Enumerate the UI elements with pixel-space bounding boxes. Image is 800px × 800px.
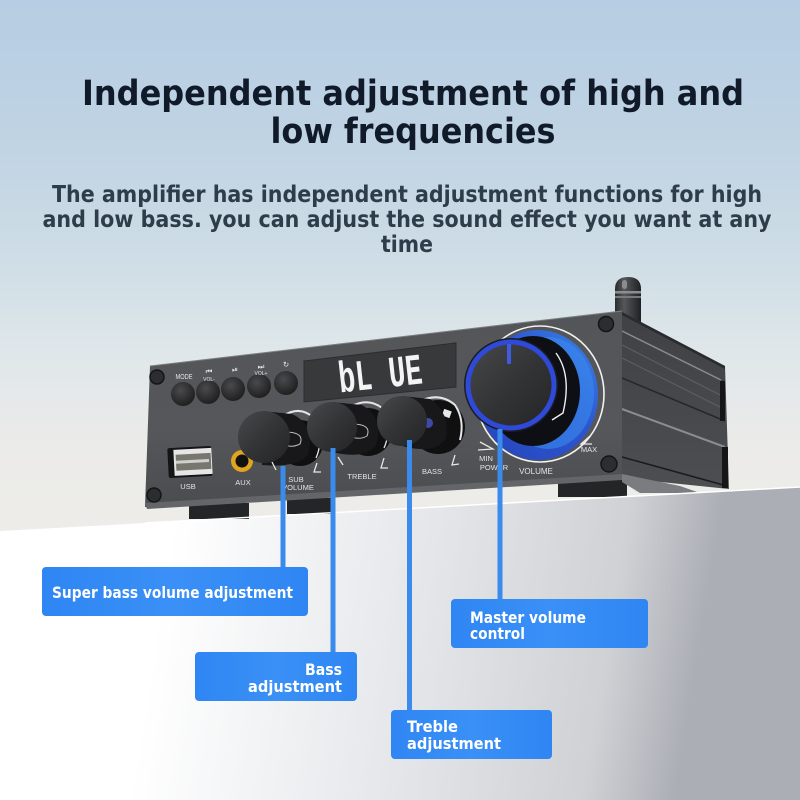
callout: master volume control: Master volume — [470, 608, 586, 627]
button labels: ⏮ — [206, 367, 213, 376]
master volume labels: VOLUME — [519, 467, 553, 476]
table surface — [0, 487, 800, 800]
USB port — [167, 446, 213, 491]
knob: sub volume — [238, 411, 323, 492]
knob: sub volume: SUB — [288, 475, 304, 484]
description text — [42, 182, 772, 258]
callout: bass adjustment: adjustment — [248, 677, 342, 696]
description text: time — [381, 232, 433, 258]
master volume labels: MAX — [581, 445, 597, 454]
title: Independent adjustment of high and — [82, 74, 744, 114]
callout: treble adjustment — [391, 710, 552, 759]
amplifier — [145, 277, 729, 519]
master volume labels — [479, 445, 597, 476]
callout: super bass volume adjustment: Super bass volume adjustment — [52, 583, 293, 602]
callout: master volume control: control — [470, 624, 525, 643]
button labels: ↻ — [283, 360, 289, 369]
callout: treble adjustment: adjustment — [407, 734, 501, 753]
button labels: VOL+ — [255, 371, 268, 377]
front panel — [145, 311, 622, 507]
knob: treble — [307, 402, 392, 481]
master volume labels: POWER — [480, 463, 509, 472]
button labels: ⏭ — [258, 362, 265, 371]
scale marks — [272, 436, 592, 472]
callout: super bass volume adjustment — [42, 567, 308, 616]
master volume labels: MIN — [479, 454, 493, 463]
knob: bass — [377, 396, 465, 476]
LED display: bL UE — [336, 348, 425, 406]
AUX jack: AUX — [235, 478, 251, 487]
callout: bass adjustment — [195, 652, 357, 701]
side fins — [622, 312, 729, 493]
knob: sub volume: VOLUME — [282, 483, 314, 492]
knob: treble: TREBLE — [347, 472, 377, 481]
buttons — [171, 371, 298, 406]
title: low frequencies — [270, 112, 556, 152]
AUX jack — [231, 450, 253, 487]
background sky — [0, 0, 800, 540]
button labels — [176, 360, 289, 383]
connector lines — [280, 429, 502, 711]
callout: master volume control — [451, 599, 648, 648]
table edge highlight — [145, 487, 800, 523]
antenna — [615, 277, 641, 325]
callout: treble adjustment: Treble — [407, 717, 458, 736]
USB port: USB — [180, 482, 196, 491]
feet — [189, 480, 627, 519]
button labels: ⏯ — [232, 365, 238, 374]
knob: bass: BASS — [422, 467, 442, 476]
button labels: MODE — [176, 372, 192, 381]
title — [82, 74, 744, 152]
callout: bass adjustment: Bass — [305, 660, 342, 679]
button labels: VOL- — [203, 377, 215, 383]
master volume knob — [464, 326, 604, 462]
screws — [147, 316, 617, 502]
